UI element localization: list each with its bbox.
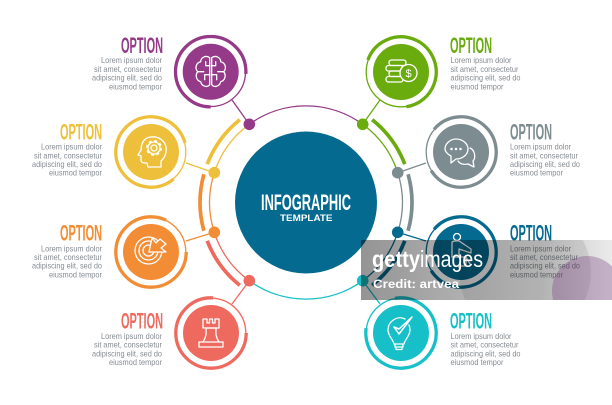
central circle with title: TEMPLATE xyxy=(280,213,333,223)
description: Lorem ipsum dolor xyxy=(510,243,571,253)
option 6: chat bubbles, gray xyxy=(392,102,580,202)
option 1: brain, purple: OPTION xyxy=(121,33,163,58)
description: eiusmod tempor xyxy=(510,269,563,279)
option 8: light bulb, teal xyxy=(357,275,521,374)
watermark band xyxy=(361,240,612,300)
description: sit amet, consectetur xyxy=(450,340,519,350)
watermark logotype: Credit: artvea xyxy=(373,277,459,291)
description xyxy=(92,331,162,367)
description xyxy=(510,142,580,178)
option 6: chat bubbles, gray: OPTION xyxy=(510,119,552,144)
watermark logotype xyxy=(372,246,483,291)
description: Lorem ipsum dolor xyxy=(41,142,102,152)
option 2: head with gear, yellow: OPTION xyxy=(60,119,102,144)
option 1: brain, purple xyxy=(92,33,255,130)
option 3: target, orange: OPTION xyxy=(60,221,102,246)
description: sit amet, consectetur xyxy=(94,340,162,350)
icon: coins with dollar: $ xyxy=(405,68,412,80)
icon: light bulb with check xyxy=(388,317,412,350)
icon: chat bubbles xyxy=(445,139,475,167)
description: adipiscing elit, sed do xyxy=(450,73,521,83)
description: eiusmod tempor xyxy=(450,81,504,91)
description: Lorem ipsum dolor xyxy=(450,331,512,341)
description: Lorem ipsum dolor xyxy=(510,142,571,152)
ring of thin connecting arcs xyxy=(210,106,402,299)
description xyxy=(450,55,521,91)
description: eiusmod tempor xyxy=(450,357,504,367)
option 4: rook, red xyxy=(92,275,255,368)
description xyxy=(450,331,521,367)
description xyxy=(510,243,580,279)
watermark logotype: images xyxy=(420,246,483,272)
central circle with title xyxy=(235,132,377,274)
description: adipiscing elit, sed do xyxy=(450,348,521,358)
ring of thick outer arcs xyxy=(200,120,412,285)
description: adipiscing elit, sed do xyxy=(510,261,580,271)
description xyxy=(92,55,162,91)
description: sit amet, consectetur xyxy=(34,150,102,160)
description: Lorem ipsum dolor xyxy=(101,331,162,341)
description: sit amet, consectetur xyxy=(34,252,102,262)
description: adipiscing elit, sed do xyxy=(92,73,162,83)
description: adipiscing elit, sed do xyxy=(92,348,162,358)
icon: head with gear xyxy=(138,137,166,167)
description xyxy=(32,243,102,279)
icon: coins with dollar xyxy=(386,60,417,82)
option 2: head with gear, yellow xyxy=(32,102,220,202)
icon: brain xyxy=(196,56,225,86)
icon: person at desk xyxy=(452,234,471,269)
description: sit amet, consectetur xyxy=(94,64,162,74)
option 5: coins, green xyxy=(356,27,521,130)
description: sit amet, consectetur xyxy=(510,150,578,160)
option 7: person, blue xyxy=(392,202,580,302)
description: eiusmod tempor xyxy=(49,168,102,178)
description: Lorem ipsum dolor xyxy=(101,55,162,65)
option 4: rook, red: OPTION xyxy=(121,309,163,334)
description: adipiscing elit, sed do xyxy=(510,159,580,169)
option 3: target, orange xyxy=(32,217,220,287)
description: Lorem ipsum dolor xyxy=(41,243,102,253)
description xyxy=(32,142,102,178)
description: eiusmod tempor xyxy=(510,168,563,178)
description: adipiscing elit, sed do xyxy=(32,261,102,271)
description: eiusmod tempor xyxy=(109,81,162,91)
option 8: light bulb, teal: OPTION xyxy=(450,309,492,334)
description: Lorem ipsum dolor xyxy=(450,55,512,65)
icon: target with arrow xyxy=(135,237,166,264)
watermark logotype: getty xyxy=(372,246,420,272)
option 7: person, blue: OPTION xyxy=(510,221,552,246)
description: adipiscing elit, sed do xyxy=(32,159,102,169)
description: sit amet, consectetur xyxy=(450,64,519,74)
central circle with title: INFOGRAPHIC xyxy=(261,190,351,215)
description: eiusmod tempor xyxy=(109,357,162,367)
option 5: coins, green: OPTION xyxy=(450,33,492,58)
description: eiusmod tempor xyxy=(49,269,102,279)
icon: chess rook xyxy=(199,319,223,347)
description: sit amet, consectetur xyxy=(510,252,578,262)
